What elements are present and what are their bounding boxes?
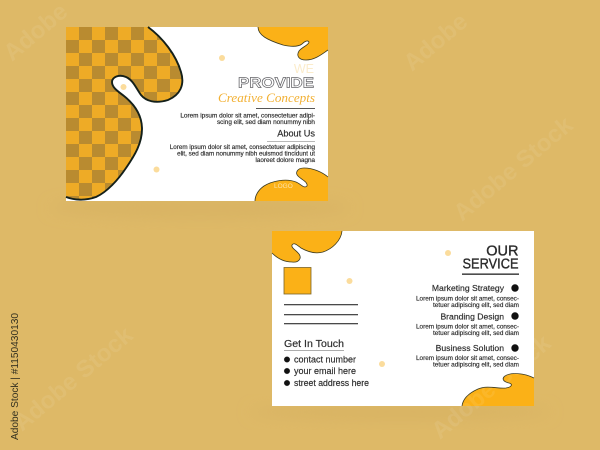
- top left blob: [272, 231, 342, 262]
- service: branding design: tetuer adipiscing elit, sed diam: [433, 330, 519, 337]
- logo square: [284, 268, 311, 294]
- service: marketing strategy: Lorem ipsum dolor sit amet, consec-: [416, 296, 519, 302]
- service: branding design: [416, 312, 519, 337]
- text block: intro: Lorem ipsum dolor sit amet, consectetuer adipi-: [180, 112, 315, 120]
- panel: front card: [66, 27, 328, 201]
- contact list: your email here: [294, 366, 356, 376]
- service: marketing strategy: tetuer adipiscing elit, sed diam: [433, 302, 519, 309]
- heading: our service: SERVICE: [462, 256, 519, 272]
- decorative dots: [346, 250, 451, 367]
- text block: intro: scing elit, sed diam nonummy nibh: [217, 119, 315, 126]
- watermarks: Adobe Stock: [449, 111, 579, 227]
- panel: back card: [272, 231, 534, 406]
- watermarks: Adobe Stock: [9, 321, 139, 437]
- text block: about: Lorem ipsum dolor sit amet, consectetuer adipiscing: [170, 144, 315, 151]
- watermarks: Adobe: [399, 8, 473, 77]
- background shadow under cards: [50, 197, 550, 421]
- logo text: LOGO: [274, 183, 293, 190]
- service: branding design: Lorem ipsum dolor sit amet, consec-: [416, 324, 519, 330]
- heading: get in touch: Get In Touch: [284, 338, 344, 350]
- heading: about us: About Us: [277, 128, 315, 138]
- top right blob: [258, 27, 328, 60]
- text block: intro: [180, 112, 315, 126]
- service: business solution: Lorem ipsum dolor sit amet, consec-: [416, 355, 519, 362]
- service: business solution: [416, 343, 519, 368]
- text block: about: [170, 144, 315, 164]
- bottom right blob: [255, 168, 328, 201]
- credit text: Adobe Stock | #1150430130: [9, 313, 21, 440]
- service: business solution: Business Solution: [436, 343, 504, 353]
- service: branding design: Branding Design: [440, 312, 504, 322]
- contact list: street address here: [294, 378, 369, 388]
- bottom right blob: [462, 374, 534, 406]
- heading: our service: [462, 244, 519, 272]
- watermarks: Adobe Stock: [427, 329, 557, 445]
- decorative dots: [120, 55, 225, 172]
- service: marketing strategy: Marketing Strategy: [432, 283, 505, 293]
- heading: we: WE: [294, 62, 314, 76]
- text block: about: elit, sed diam nonummy nibh euismod tincidunt ut: [177, 150, 315, 158]
- heading: provide: PROVIDE: [238, 74, 314, 92]
- contact list: [284, 354, 369, 388]
- lines: [284, 304, 358, 324]
- checkered wave shape: [66, 27, 182, 200]
- subheading: creative concepts: Creative Concepts: [218, 90, 315, 105]
- service: business solution: tetuer adipiscing elit, sed diam: [433, 362, 519, 368]
- contact list: contact number: [294, 354, 356, 364]
- text block: about: laoreet dolore magna: [255, 157, 315, 164]
- heading: our service: OUR: [486, 244, 518, 260]
- service: marketing strategy: [416, 283, 519, 309]
